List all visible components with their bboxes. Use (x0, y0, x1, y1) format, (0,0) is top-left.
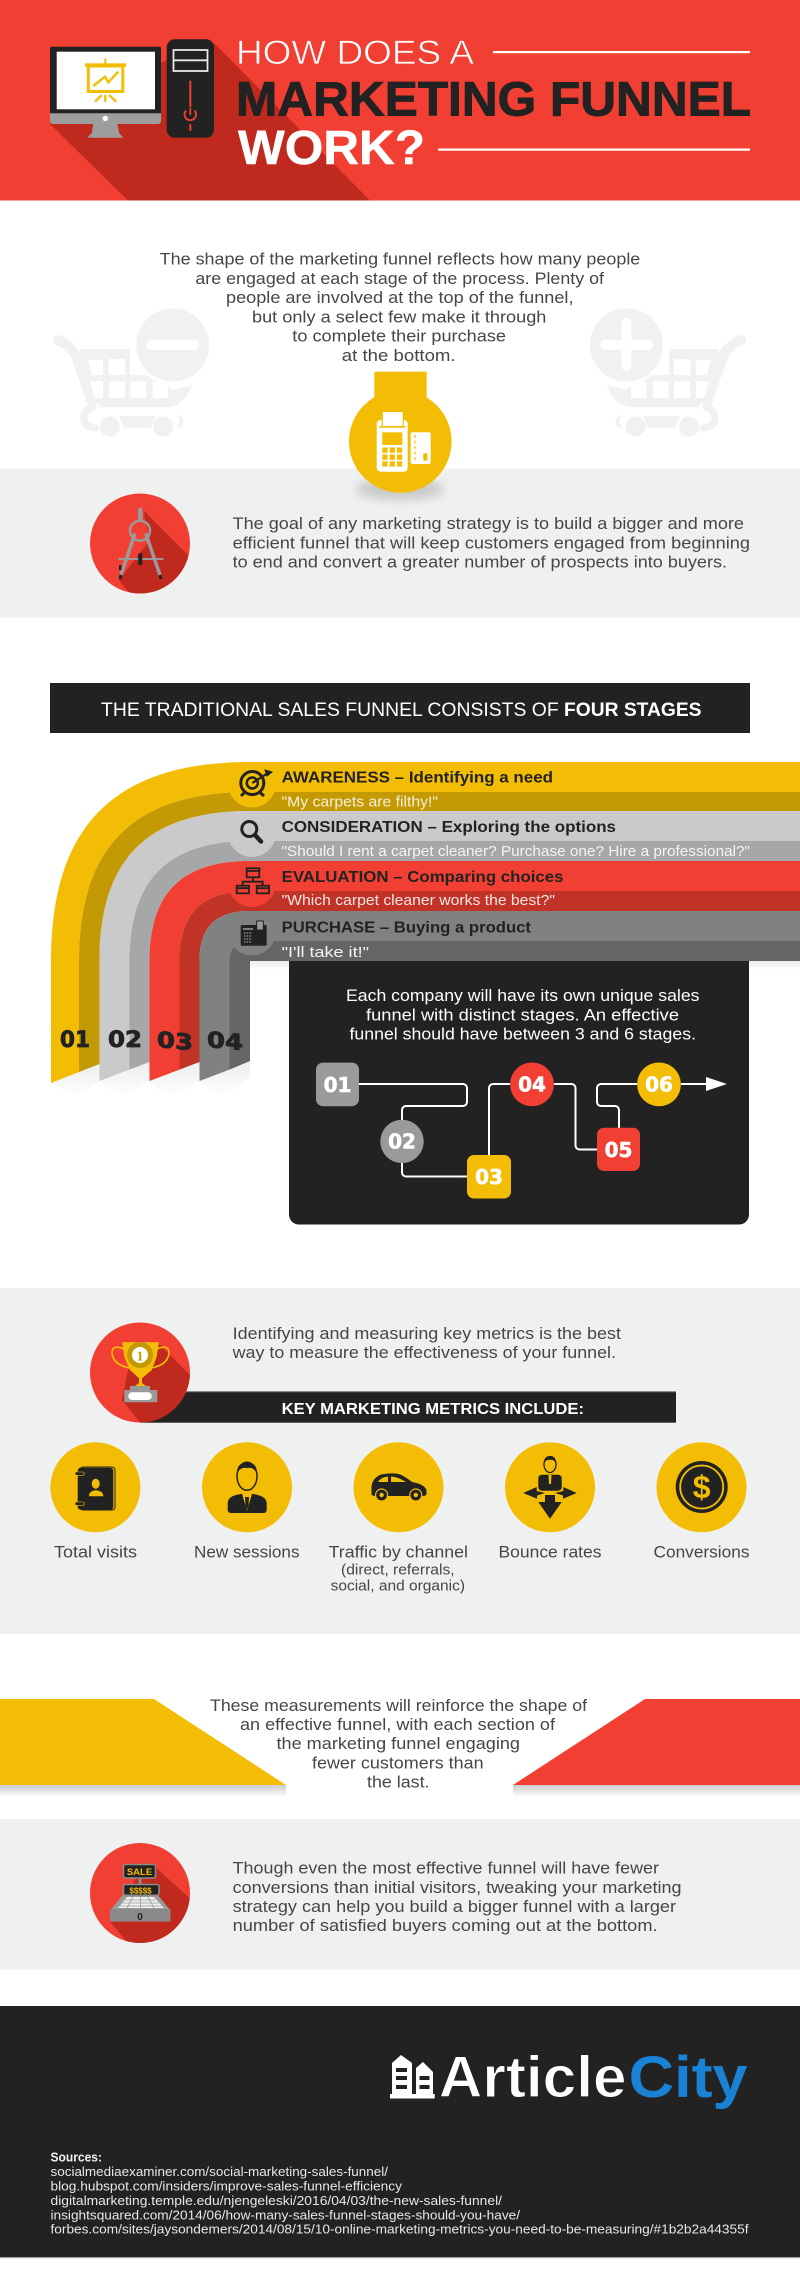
ribbon shadows (51, 1061, 250, 1098)
panel: key metrics (0, 1288, 800, 1634)
label: Traffic by channel (329, 1543, 468, 1562)
title: HOW DOES A (236, 34, 474, 72)
label: (direct, referrals, (341, 1562, 455, 1578)
wedge shadows (0, 1785, 800, 1797)
key metrics heading bar (140, 1391, 676, 1423)
metrics intro text: Identifying and measuring key metrics is the best (233, 1324, 621, 1343)
metric: bounce rates (498, 1442, 602, 1562)
ribbon: consideration (100, 811, 800, 1081)
header banner (0, 0, 800, 200)
logo: ArticleCity: Article (439, 2045, 626, 2110)
goal text: to end and convert a greater number of prospects into buyers. (233, 552, 727, 571)
sources: digitalmarketing.temple.edu/njengeleski/2016/04/03/the-new-sales-funnel/ (50, 2193, 502, 2208)
title (236, 34, 751, 175)
icon: cash register (90, 1843, 190, 1943)
flow node 05: 05 (605, 1138, 632, 1162)
label: New sessions (194, 1543, 300, 1562)
stage text: awareness (282, 770, 553, 811)
stage text: evaluation (282, 869, 564, 909)
section: funnel wedges (0, 1696, 800, 1797)
stage numbers: 02 (108, 1028, 142, 1053)
panel text (346, 986, 700, 1044)
flow node 03 (467, 1155, 511, 1198)
goal text (233, 514, 750, 571)
logo: ArticleCity (390, 2045, 748, 2110)
icon: magnifier (242, 822, 261, 842)
key metrics heading bar: KEY MARKETING METRICS INCLUDE: (282, 1401, 584, 1418)
stage numbers (60, 1028, 243, 1056)
closing text: strategy can help you build a bigger funnel with a larger (233, 1897, 676, 1916)
stage text: purchase: "I'll take it!" (282, 944, 369, 961)
icon: cash register: $$$$$ (129, 1886, 152, 1895)
metrics intro text: way to measure the effectiveness of your funnel. (232, 1343, 616, 1362)
sources: forbes.com/sites/jaysondemers/2014/08/15/10-online-marketing-metrics-you-need-to-be-measuring/#1b2b2a44355f (50, 2222, 749, 2237)
measurements text: the marketing funnel engaging (276, 1734, 520, 1753)
stage text: awareness: AWARENESS – Identifying a need (282, 770, 553, 786)
measurements text: These measurements will reinforce the shape of (210, 1696, 587, 1715)
icon: car (372, 1473, 426, 1501)
icon: address book (75, 1467, 115, 1510)
panel text: funnel should have between 3 and 6 stages. (350, 1024, 696, 1044)
stage text: purchase: PURCHASE – Buying a product (282, 920, 532, 936)
stage text: evaluation: EVALUATION – Comparing choices (282, 869, 564, 886)
icon: trophy (90, 1322, 190, 1422)
title: MARKETING FUNNEL (236, 74, 751, 126)
icon: org chart (237, 868, 269, 893)
panel: marketing goal (0, 468, 800, 618)
title: WORK? (238, 122, 425, 175)
flow node 01 (316, 1063, 359, 1106)
flow node 03: 03 (475, 1165, 503, 1189)
closing text: Though even the most effective funnel will have fewer (233, 1859, 659, 1878)
label (329, 1543, 468, 1595)
icon: payment terminal badge (349, 372, 452, 500)
sources (50, 2150, 749, 2237)
ribbon: evaluation (150, 861, 800, 1081)
panel: company funnel stages (250, 961, 800, 1224)
icon: desktop monitor with chart (50, 47, 161, 138)
measurements text: an effective funnel, with each section of (240, 1715, 555, 1734)
metric: new sessions (194, 1442, 300, 1562)
label: social, and organic) (331, 1579, 465, 1595)
stage numbers: 03 (157, 1028, 193, 1056)
sources: Sources: (50, 2150, 102, 2164)
intro text: are engaged at each stage of the process. Plenty of (195, 269, 604, 288)
measurements text: fewer customers than (312, 1753, 484, 1772)
measurements text (210, 1696, 587, 1792)
metric: conversions (654, 1442, 750, 1562)
icon: trophy: 1 (136, 1350, 144, 1364)
icon: dollar coin: $ (693, 1469, 711, 1505)
stage numbers: 04 (207, 1028, 243, 1056)
metrics intro text (232, 1324, 621, 1362)
icon: businessman (228, 1462, 267, 1513)
intro text: but only a select few make it through (252, 307, 546, 326)
label: Total visits (54, 1543, 137, 1562)
metric: total visits (50, 1442, 140, 1562)
closing text: conversions than initial visitors, tweaking your marketing (233, 1878, 682, 1897)
icon: shopping cart with minus (58, 307, 211, 436)
intro text: The shape of the marketing funnel reflects how many people (160, 250, 640, 268)
flow node 04: 04 (518, 1072, 546, 1096)
ribbon: purchase (200, 911, 800, 1081)
footer (0, 2006, 800, 2258)
icon: drafting compass (90, 494, 190, 594)
metric: traffic by channel (329, 1442, 468, 1595)
flow node 06 (637, 1062, 681, 1106)
panel text: funnel with distinct stages. An effective (366, 1005, 679, 1024)
stage text: evaluation: "Which carpet cleaner works the best?" (282, 892, 555, 909)
goal text: The goal of any marketing strategy is to build a bigger and more (233, 514, 744, 533)
panel: closing message (0, 1819, 800, 1970)
icon: cash register: SALE (127, 1867, 152, 1878)
flow node 02: 02 (388, 1130, 416, 1154)
intro text (160, 250, 640, 365)
logo: ArticleCity: City (629, 2045, 748, 2110)
flow node 02 (380, 1120, 424, 1163)
measurements text: the last. (367, 1773, 430, 1792)
icon: cash register: 0 (137, 1912, 143, 1923)
intro text: at the bottom. (342, 346, 456, 365)
flow connector lines (359, 1084, 708, 1176)
icon: shopping cart with plus (588, 307, 741, 436)
flow node 05 (597, 1128, 640, 1171)
goal text: efficient funnel that will keep customers engaged from beginning (233, 533, 750, 552)
stages heading bar (50, 683, 750, 733)
flow node 01: 01 (324, 1073, 351, 1097)
panel text: Each company will have its own unique sales (346, 986, 700, 1005)
label: Bounce rates (498, 1543, 602, 1562)
intro text: to complete their purchase (292, 326, 506, 346)
closing text (233, 1859, 682, 1935)
sources: blog.hubspot.com/insiders/improve-sales-funnel-efficiency (50, 2178, 403, 2194)
sources: insightsquared.com/2014/06/how-many-sales-funnel-stages-should-you-have/ (50, 2207, 520, 2222)
icon: city buildings (390, 2055, 435, 2098)
icon: businessman with arrows (523, 1456, 577, 1519)
label: Conversions (654, 1543, 750, 1562)
stage text: consideration: "Should I rent a carpet cleaner? Purchase one? Hire a professional?" (282, 843, 750, 860)
icon: fax phone (241, 921, 267, 946)
red wedge (513, 1699, 800, 1785)
flow node 06: 06 (645, 1072, 673, 1096)
intro text: people are involved at the top of the funnel, (226, 288, 574, 307)
arrow (706, 1077, 727, 1091)
stage text: awareness: "My carpets are filthy!" (282, 794, 438, 811)
yellow wedge (0, 1699, 286, 1785)
stage text: consideration: CONSIDERATION – Exploring the options (282, 819, 616, 836)
funnel stage ribbons (51, 762, 800, 1098)
flow node 04 (510, 1062, 554, 1106)
icon: target (241, 770, 272, 796)
ribbon: awareness (51, 762, 800, 1083)
closing text: number of satisfied buyers coming out at the bottom. (233, 1916, 658, 1935)
sources: socialmediaexaminer.com/social-marketing-sales-funnel/ (50, 2164, 388, 2179)
stage text: consideration (282, 819, 750, 860)
icon: computer tower (167, 39, 214, 138)
stages heading bar: THE TRADITIONAL SALES FUNNEL CONSISTS OF (101, 699, 559, 721)
stages heading bar: FOUR STAGES (564, 699, 702, 721)
stage numbers: 01 (60, 1028, 90, 1053)
stage text: purchase (282, 920, 532, 961)
